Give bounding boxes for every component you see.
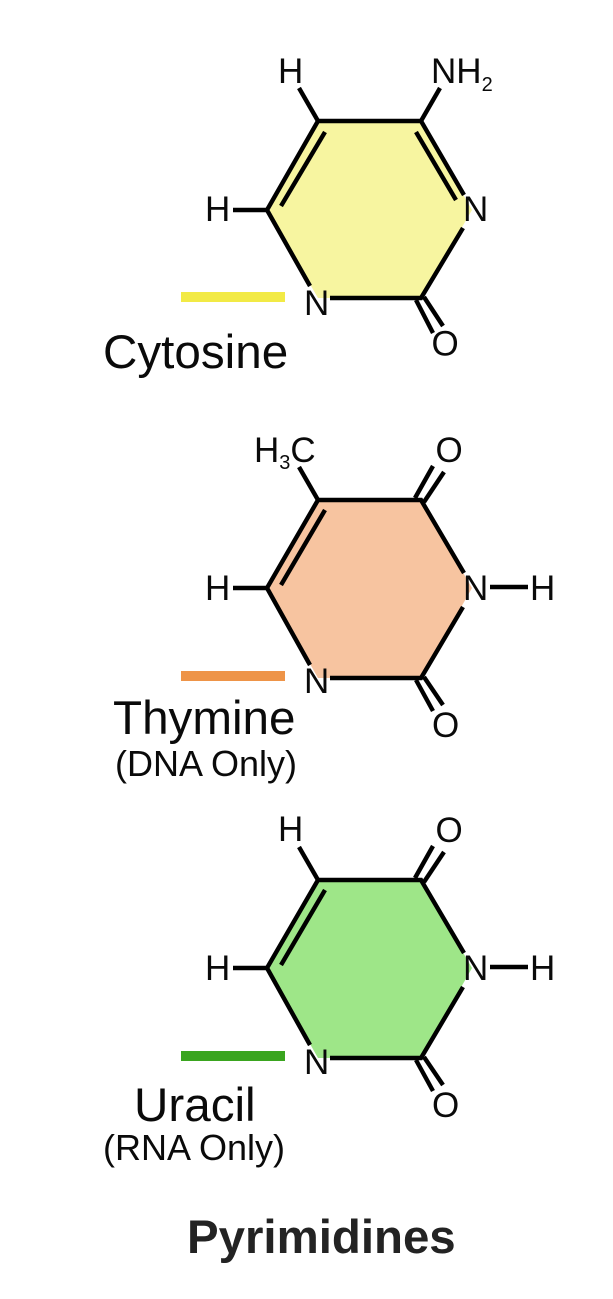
- atom labels: thymine: O: [432, 706, 459, 745]
- note: RNA only: (RNA Only): [103, 1127, 285, 1168]
- atom labels: thymine: N: [463, 569, 488, 608]
- ring fill: cytosine: [267, 121, 472, 298]
- atom labels: cytosine: H: [278, 52, 303, 91]
- atom labels: cytosine: N: [463, 190, 488, 229]
- atom labels: uracil: N: [463, 949, 488, 988]
- ring fill: thymine: [267, 500, 472, 678]
- atom labels: cytosine: O: [432, 324, 459, 364]
- atom labels: cytosine: [205, 52, 493, 364]
- atom labels: uracil: [205, 810, 555, 1125]
- atom labels: thymine: N: [304, 662, 329, 701]
- panel: thymine: [113, 431, 555, 784]
- note: DNA only: (DNA Only): [115, 743, 297, 784]
- atom labels: cytosine: NH: [431, 52, 482, 91]
- atom labels: cytosine: 2: [482, 74, 493, 96]
- atom labels: uracil: N: [304, 1043, 329, 1082]
- atom labels: thymine: 3: [279, 452, 290, 474]
- bonds: thymine: [233, 466, 528, 711]
- panel: uracil: [103, 810, 555, 1168]
- color key: uracil: [181, 1051, 285, 1061]
- color key: thymine: [181, 671, 285, 681]
- atom labels: uracil: O: [436, 811, 463, 850]
- name: uracil: Uracil: [134, 1079, 256, 1132]
- color key: cytosine: [181, 292, 285, 302]
- atom labels: uracil: H: [530, 949, 555, 988]
- atom labels: thymine: H: [530, 569, 555, 608]
- atom labels: thymine: O: [436, 431, 463, 470]
- atom labels: thymine: [205, 431, 555, 745]
- panel: cytosine: [103, 52, 493, 379]
- title: Pyrimidines: [187, 1211, 456, 1264]
- name: thymine: Thymine: [113, 692, 296, 745]
- ring fill: uracil: [267, 880, 472, 1058]
- atom labels: uracil: H: [205, 949, 230, 988]
- atom labels: thymine: H: [205, 569, 230, 608]
- bonds: uracil: [233, 846, 528, 1091]
- atom labels: uracil: H: [278, 810, 303, 849]
- atom labels: cytosine: H: [205, 190, 230, 229]
- atom labels: thymine: H: [254, 431, 279, 470]
- atom labels: cytosine: N: [304, 284, 329, 323]
- name: cytosine: Cytosine: [103, 326, 288, 379]
- bonds: cytosine: [233, 88, 464, 333]
- atom labels: thymine: C: [290, 431, 316, 470]
- atom labels: uracil: O: [432, 1086, 459, 1125]
